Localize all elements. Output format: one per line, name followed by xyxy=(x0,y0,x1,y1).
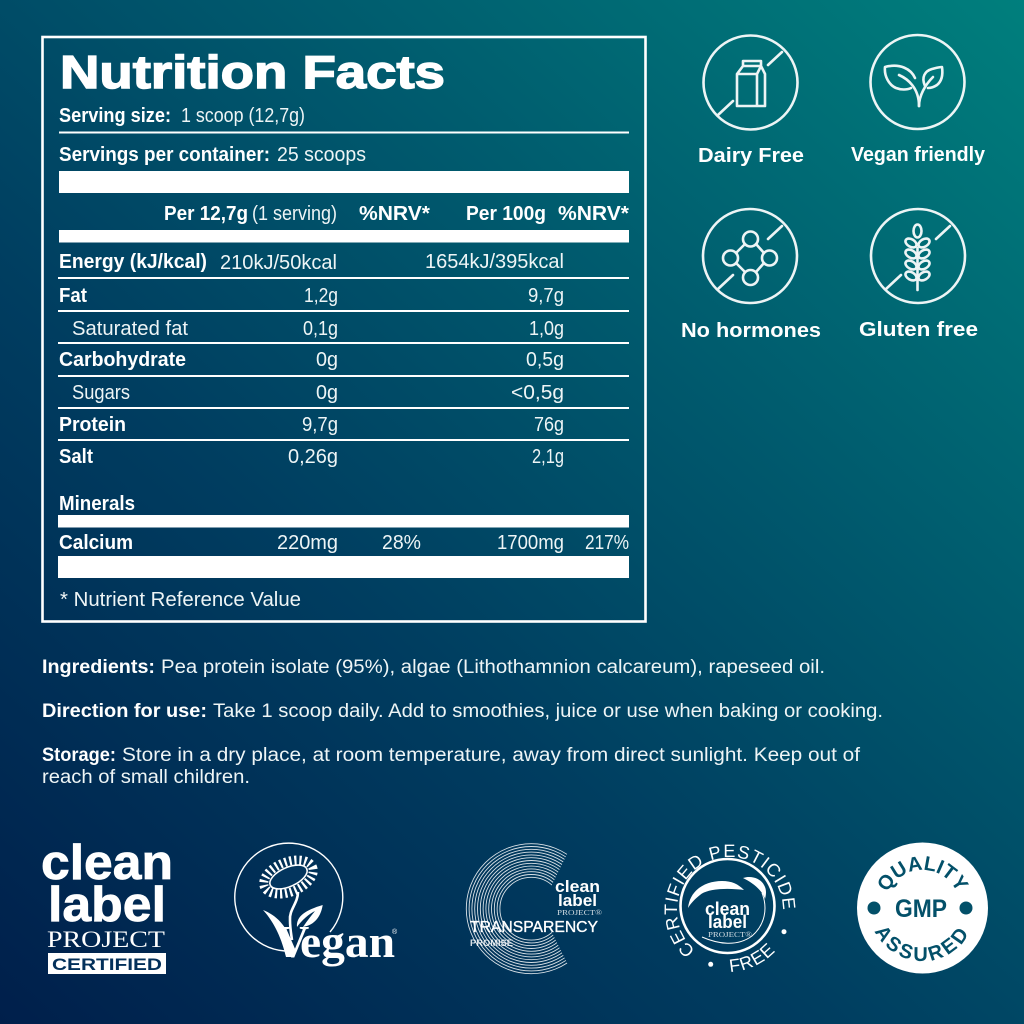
label: no hormones: No hormones xyxy=(681,320,821,342)
column headers: %NRV* xyxy=(359,203,430,225)
row: fat xyxy=(59,285,564,307)
row: calcium xyxy=(59,532,629,554)
icon: gluten free xyxy=(871,209,965,303)
ingredients: Pea protein isolate (95%), algae (Lithothamnion calcareum), rapeseed oil. xyxy=(161,657,825,678)
column headers: %NRV* xyxy=(558,203,629,225)
storage: Storage: xyxy=(42,745,116,766)
row: saturated fat: 1,0g xyxy=(529,318,564,340)
logo: GMP quality assured: QUALITY xyxy=(878,856,969,890)
logo: certified pesticide free: PROJECT® xyxy=(708,930,752,939)
serving size: Serving size: xyxy=(59,105,171,127)
servings per container: Servings per container: xyxy=(59,144,270,166)
column headers: Per 100g xyxy=(466,203,546,225)
logo: certified pesticide free: FREE xyxy=(730,942,775,972)
row: salt xyxy=(59,446,564,468)
logo: clean label project certified xyxy=(41,836,173,974)
row: sugars: Sugars xyxy=(72,382,130,404)
row: calcium: Calcium xyxy=(59,532,133,554)
servings per container: 25 scoops xyxy=(277,144,366,166)
row: fat: Fat xyxy=(59,285,87,307)
row: saturated fat: Saturated fat xyxy=(72,318,188,340)
column headers: Per 12,7g xyxy=(164,203,248,225)
logo: certified pesticide free: label xyxy=(708,912,747,932)
logo: GMP quality assured: ASSURED xyxy=(874,928,966,962)
logo: vegan sunflower: ® xyxy=(392,928,398,936)
row: energy: 210kJ/50kcal xyxy=(220,252,337,274)
panel frame xyxy=(42,37,646,622)
logo: certified pesticide free: CERTIFIED PESTICIDE xyxy=(664,844,796,956)
row: calcium: 217% xyxy=(585,532,629,554)
logo: clean label project certified: PROJECT xyxy=(47,927,165,952)
column headers: (1 serving) xyxy=(252,203,337,225)
logo: transparency promise xyxy=(466,844,602,974)
serving size: 1 scoop (12,7g) xyxy=(181,105,305,127)
logo: clean label project certified: label xyxy=(48,878,166,932)
storage: reach of small children. xyxy=(42,767,250,788)
logo: transparency promise: PROJECT® xyxy=(557,908,602,917)
logo: clean label project certified: CERTIFIED xyxy=(52,955,162,974)
row: energy xyxy=(59,251,564,274)
text block: product information xyxy=(42,657,883,788)
logo: GMP quality assured: GMP xyxy=(895,895,947,923)
row: carbohydrate: 0g xyxy=(316,349,338,371)
directions: Direction for use: xyxy=(42,701,207,722)
row: protein xyxy=(59,414,564,436)
logo: clean label project certified: clean xyxy=(41,836,173,890)
logo: certified pesticide free: clean xyxy=(705,899,750,919)
minerals heading: Minerals xyxy=(59,493,135,515)
logo: transparency promise: label xyxy=(558,891,597,910)
storage: Store in a dry place, at room temperature, away from direct sunlight. Keep out of xyxy=(122,745,861,766)
row: fat: 9,7g xyxy=(528,285,564,307)
row: calcium: 220mg xyxy=(277,532,338,554)
logo: vegan sunflower xyxy=(235,843,398,967)
directions: Take 1 scoop daily. Add to smoothies, juice or use when baking or cooking. xyxy=(213,701,883,722)
logo: transparency promise: clean xyxy=(555,877,600,896)
logo: GMP quality assured xyxy=(857,842,988,974)
label: gluten free: Gluten free xyxy=(859,319,978,341)
row: saturated fat: 0,1g xyxy=(303,318,338,340)
row: salt: 2,1g xyxy=(532,446,564,468)
certification logos xyxy=(41,836,988,974)
logo: transparency promise: TRANSPARENCY xyxy=(470,919,598,936)
panel: dietary icons xyxy=(681,35,986,342)
icon: vegan friendly xyxy=(870,35,964,129)
row: carbohydrate: 0,5g xyxy=(526,349,564,371)
row: salt: 0,26g xyxy=(288,446,338,468)
row: calcium: 28% xyxy=(382,532,421,554)
panel: nutrition facts xyxy=(42,37,646,622)
logo: transparency promise: PROMISE xyxy=(470,938,513,948)
row: sugars: 0g xyxy=(316,382,338,404)
column headers xyxy=(164,203,629,225)
row: protein: Protein xyxy=(59,414,126,436)
row: protein: 76g xyxy=(534,414,564,436)
title: Nutrition Facts xyxy=(60,46,445,98)
row: saturated fat xyxy=(72,318,564,340)
row: salt: Salt xyxy=(59,446,93,468)
storage xyxy=(42,745,861,788)
row: energy: Energy (kJ/kcal) xyxy=(59,251,207,273)
ingredients: Ingredients: xyxy=(42,657,155,678)
table rules and bars xyxy=(58,132,629,578)
row: energy: 1654kJ/395kcal xyxy=(425,251,564,273)
logo: vegan sunflower: V xyxy=(276,916,309,967)
label: vegan friendly: Vegan friendly xyxy=(851,144,986,166)
label: dairy free: Dairy Free xyxy=(698,145,804,167)
row: calcium: 1700mg xyxy=(497,532,564,554)
serving size xyxy=(59,105,305,127)
footnote: * Nutrient Reference Value xyxy=(60,589,301,611)
row: sugars: <0,5g xyxy=(511,382,564,404)
row: sugars xyxy=(72,382,564,404)
row: carbohydrate xyxy=(59,349,564,371)
row: fat: 1,2g xyxy=(304,285,338,307)
icon: no hormones xyxy=(703,209,797,303)
icon: dairy free xyxy=(704,36,798,130)
row: protein: 9,7g xyxy=(302,414,338,436)
row: carbohydrate: Carbohydrate xyxy=(59,349,186,371)
logo: vegan sunflower: egan xyxy=(300,916,395,967)
